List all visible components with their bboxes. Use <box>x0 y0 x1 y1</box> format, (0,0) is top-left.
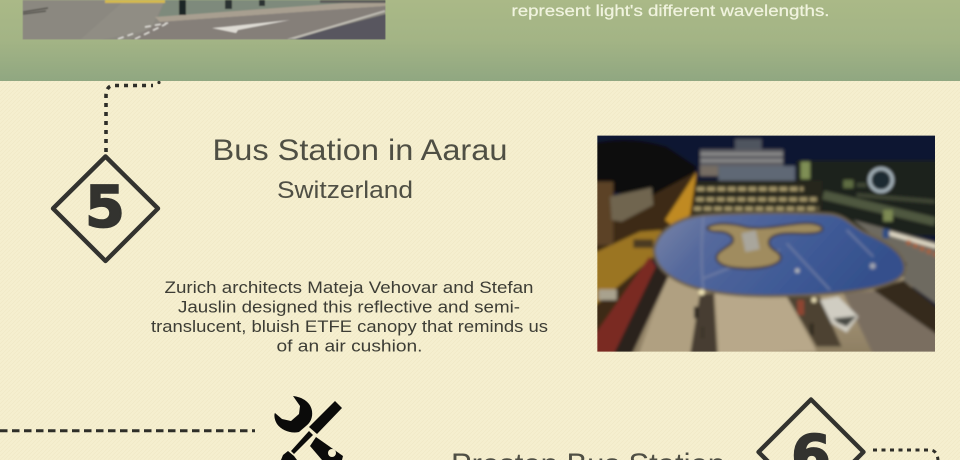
marker: number 5 diamond: 5 <box>85 174 125 240</box>
icon: wrench and screwdriver <box>274 396 343 460</box>
description text: Jauslin designed this reflective and semi- <box>178 298 520 316</box>
description text <box>151 279 548 356</box>
photo: Aarau bus station at night <box>593 132 940 356</box>
green header band <box>0 0 960 81</box>
grey upper building <box>735 139 762 151</box>
description text: Zurich architects Mateja Vehovar and Stefan <box>164 279 534 297</box>
lamps and people <box>699 289 705 295</box>
subheading: Switzerland: Switzerland <box>277 177 413 204</box>
lit lower building <box>692 181 822 217</box>
bus <box>820 297 858 333</box>
dotted connector from marker 6 <box>873 450 938 460</box>
left orange street <box>597 169 696 332</box>
canopy opening <box>707 223 822 269</box>
caption on green band: represent light's different wavelengths. <box>512 3 830 20</box>
description text: translucent, bluish ETFE canopy that reminds us <box>151 318 548 336</box>
canopy <box>654 213 905 296</box>
pavement <box>630 275 913 352</box>
right side rubble and shops <box>853 220 940 307</box>
heading: Bus Station in Aarau: Bus Station in Aarau <box>212 134 508 167</box>
description text: of an air cushion. <box>276 338 422 356</box>
marker: number 5 diamond <box>53 156 158 261</box>
trees <box>597 139 696 196</box>
right dark building <box>797 161 940 236</box>
marker: number 6 diamond <box>758 400 864 460</box>
red road <box>593 257 656 355</box>
dotted connector to marker 5 <box>106 82 160 152</box>
photo: road beside previous station <box>22 0 386 40</box>
dashed connector to tools icon <box>0 429 255 432</box>
